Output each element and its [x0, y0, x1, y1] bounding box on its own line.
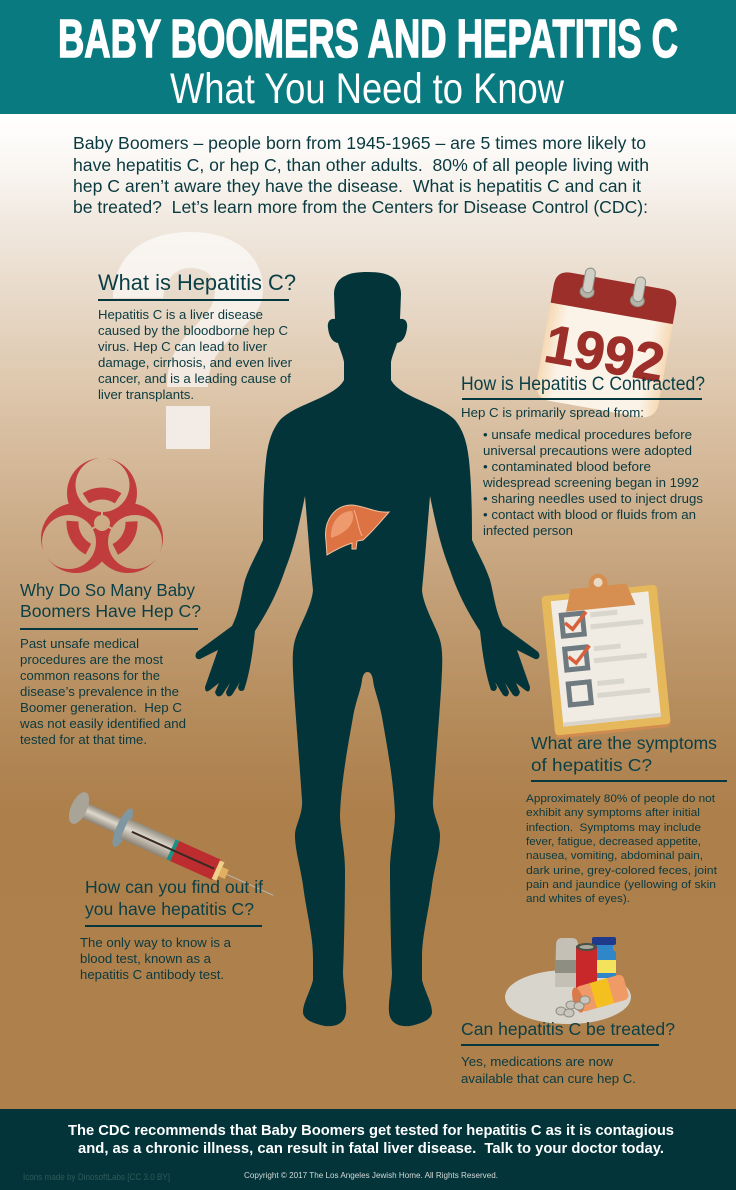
body text: disease’s prevalence in the	[20, 685, 179, 699]
body text: pain and jaundice (yellowing of skin	[526, 879, 716, 891]
body text: blood test, known as a	[80, 952, 212, 966]
subtitle: What You Need to Know	[170, 65, 565, 113]
body text: caused by the bloodborne hep C	[98, 324, 288, 338]
body text: damage, cirrhosis, and even liver	[98, 356, 293, 370]
heading: What are the symptoms	[531, 733, 717, 753]
body text: The only way to know is a	[80, 936, 232, 950]
call to action: The CDC recommends that Baby Boomers get tested for hepatitis C as it is contagious	[68, 1122, 674, 1139]
heading: Can hepatitis C be treated?	[461, 1019, 675, 1039]
panel: how is hepatitis C contracted	[461, 373, 705, 538]
body text: available that can cure hep C.	[461, 1072, 636, 1086]
body text: virus. Hep C can lead to liver	[98, 340, 268, 354]
body text	[80, 936, 232, 982]
heading	[531, 733, 717, 775]
body text: universal precautions were adopted	[483, 444, 692, 458]
icon: calendar 1992: 1992	[540, 314, 669, 394]
footer band	[0, 1109, 736, 1190]
body text: hepatitis C antibody test.	[80, 968, 224, 982]
body text: and whites of eyes).	[526, 893, 630, 905]
body text	[461, 1055, 636, 1086]
body text: fever, fatigue, decreased appetite,	[526, 836, 701, 848]
icon: medication bottles	[505, 937, 631, 1024]
body text: common reasons for the	[20, 669, 160, 683]
body text	[461, 406, 703, 538]
heading: Boomers Have Hep C?	[20, 601, 201, 621]
call to action: and, as a chronic illness, can result in fatal liver disease. Talk to your doctor today.	[78, 1140, 664, 1157]
body text: • contact with blood or fluids from an	[483, 508, 696, 522]
body text: infection. Symptoms may include	[526, 822, 701, 834]
body text: Boomer generation. Hep C	[20, 701, 182, 715]
icon: question mark	[113, 232, 263, 449]
call to action	[68, 1122, 674, 1157]
intro text	[73, 133, 649, 217]
body text: procedures are the most	[20, 653, 163, 667]
copyright: Copyright © 2017 The Los Angeles Jewish Home. All Rights Reserved.	[244, 1170, 498, 1180]
panel: why so many boomers	[19, 580, 201, 747]
body text: • sharing needles used to inject drugs	[483, 492, 703, 506]
icon: clipboard	[540, 568, 671, 738]
body text: widespread screening began in 1992	[482, 476, 699, 490]
heading: How can you find out if	[85, 877, 263, 897]
body text: Yes, medications are now	[461, 1055, 614, 1069]
body text: Hepatitis C is a liver disease	[98, 308, 263, 322]
body text: Hep C is primarily spread from:	[461, 406, 644, 420]
icon: liver	[326, 505, 389, 555]
icon: syringe	[63, 786, 282, 914]
panel: symptoms	[526, 733, 727, 905]
header banner	[0, 0, 736, 114]
body text: infected person	[483, 524, 573, 538]
body text: liver transplants.	[98, 388, 194, 402]
icon: calendar 1992	[534, 262, 680, 420]
heading	[85, 877, 263, 919]
body text	[526, 793, 718, 905]
body text: • contaminated blood before	[483, 460, 651, 474]
heading: What is Hepatitis C?	[98, 270, 296, 295]
panel: what is hepatitis C	[98, 270, 296, 402]
body text: was not easily identified and	[19, 717, 186, 731]
heading	[20, 580, 201, 621]
intro text: hep C aren’t aware they have the disease. What is hepatitis C and can it	[73, 176, 641, 196]
intro text: be treated? Let’s learn more from the Centers for Disease Control (CDC):	[73, 197, 648, 217]
panel: how can you find out	[80, 877, 263, 982]
body text	[98, 308, 293, 402]
heading: of hepatitis C?	[531, 755, 652, 775]
body silhouette	[196, 272, 539, 1026]
body text: cancer, and is a leading cause of	[98, 372, 291, 386]
icon credit: Icons made by DinosoftLabs [CC 3.0 BY]	[23, 1172, 170, 1183]
panel: can hepatitis C be treated	[461, 1019, 675, 1086]
heading: you have hepatitis C?	[85, 899, 254, 919]
body text: • unsafe medical procedures before	[483, 428, 692, 442]
body text: Past unsafe medical	[20, 637, 139, 651]
intro text: Baby Boomers – people born from 1945-1965 – are 5 times more likely to	[73, 133, 646, 153]
heading: How is Hepatitis C Contracted?	[461, 373, 705, 395]
body text	[19, 637, 186, 747]
body text: dark urine, grey-colored feces, joint	[526, 865, 718, 877]
body text: tested for at that time.	[20, 733, 147, 747]
body text: Approximately 80% of people do not	[526, 793, 716, 805]
intro text: have hepatitis C, or hep C, than other adults. 80% of all people living with	[73, 155, 649, 175]
body text: nausea, vomiting, abdominal pain,	[526, 850, 703, 862]
heading: Why Do So Many Baby	[20, 580, 195, 600]
body text: exhibit any symptoms after initial	[526, 807, 700, 819]
icon: biohazard	[41, 458, 163, 573]
